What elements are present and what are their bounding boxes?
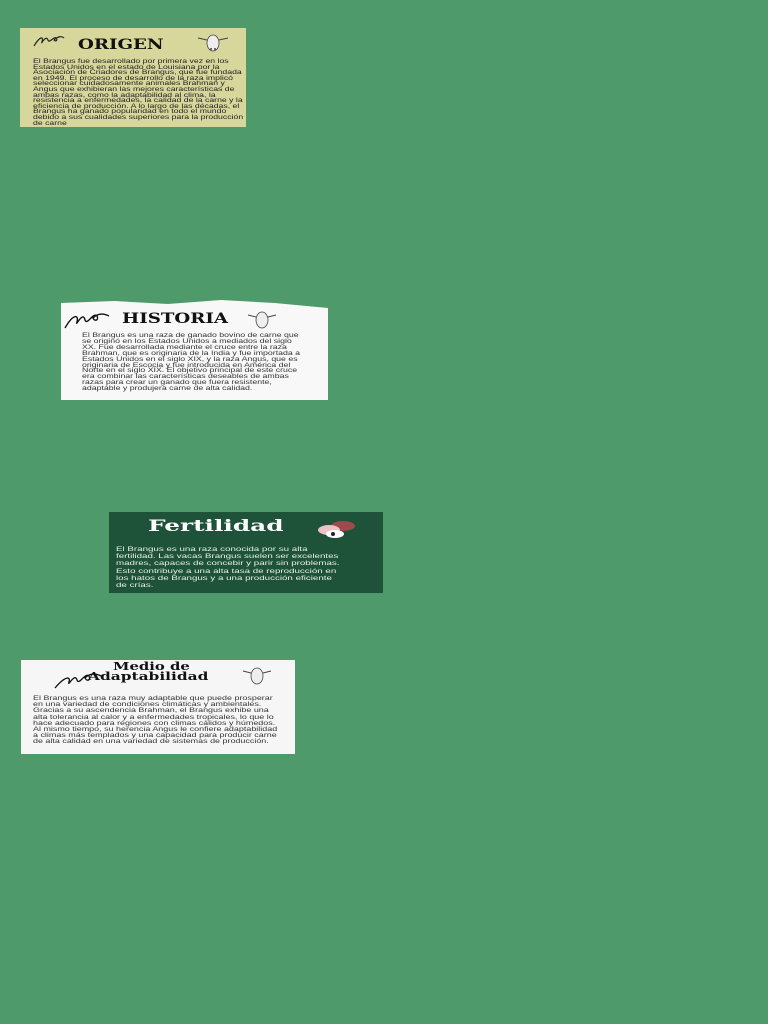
panel: origen bbox=[20, 28, 246, 127]
text: historia body: El Brangus es una raza de ganado bovino de carne que bbox=[82, 332, 299, 339]
text: adaptabilidad body: en una variedad de condiciones climáticas y ambientales. bbox=[33, 701, 261, 708]
text: adaptabilidad body: El Brangus es una raza muy adaptable que puede prosperar bbox=[33, 695, 273, 702]
heading: ORIGEN: ORIGEN bbox=[78, 37, 164, 53]
text: origen body: Asociación de Criadores de Brangus, que fue fundada bbox=[33, 69, 242, 76]
icon: swirl bbox=[64, 313, 110, 328]
text: adaptabilidad body: Gracias a su ascendencia Brahman, el Brangus exhibe una bbox=[33, 707, 269, 714]
icon: swirl bbox=[34, 36, 64, 46]
text: fertilidad body bbox=[116, 546, 339, 589]
text: adaptabilidad body: hace adecuado para regiones con climas cálidos y húmedos. bbox=[33, 720, 275, 727]
text: fertilidad body: El Brangus es una raza conocida por su alta bbox=[116, 546, 307, 553]
icon: cows bbox=[318, 521, 355, 538]
text: historia body: Norte en el siglo XIX. El objetivo principal de este cruce bbox=[82, 367, 297, 374]
text: historia body: se originó en los Estados Unidos a mediados del siglo bbox=[82, 338, 292, 345]
icon: swirl bbox=[54, 674, 102, 688]
text: historia body bbox=[82, 332, 300, 392]
text: historia body: Estados Unidos en el siglo XIX, y la raza Angus, que es bbox=[82, 356, 298, 363]
icon: cow head bbox=[198, 34, 228, 52]
icon: cow head bbox=[248, 312, 276, 328]
text: historia body: razas para crear un ganado que fuera resistente, bbox=[82, 379, 272, 386]
text: fertilidad body: los hatos de Brangus y a una producción eficiente bbox=[116, 575, 332, 582]
text: adaptabilidad body: alta tolerancia al calor y a enfermedades tropicales, lo que lo bbox=[33, 714, 274, 721]
text: adaptabilidad body: a climas más templados y una capacidad para producir carne bbox=[33, 732, 277, 739]
heading: Fertilidad: Fertilidad bbox=[148, 516, 284, 535]
text: origen body: debido a sus cualidades superiores para la producción bbox=[33, 114, 243, 121]
panel: medio de adaptabilidad bbox=[21, 660, 295, 754]
text: origen body: eficiencia de producción. A lo largo de las décadas, el bbox=[33, 103, 239, 110]
text: origen body: resistencia a enfermedades, la calidad de la carne y la bbox=[33, 97, 243, 104]
text: origen body: de carne bbox=[33, 120, 67, 127]
text: fertilidad body: fertilidad. Las vacas Brangus suelen ser excelentes bbox=[116, 553, 338, 560]
heading: Adaptabilidad: Adaptabilidad bbox=[88, 670, 208, 683]
text: adaptabilidad body bbox=[33, 695, 277, 745]
text: origen body: seleccionar cuidadosamente animales Brahman y bbox=[33, 80, 225, 87]
text: origen body: ambas razas, como la adaptabilidad al clima, la bbox=[33, 92, 216, 99]
text: fertilidad body: madres, capaces de concebir y parir sin problemas. bbox=[116, 560, 339, 567]
text: historia body: XX. Fue desarrollada mediante el cruce entre la raza bbox=[82, 344, 287, 351]
heading: Medio de: Medio de bbox=[113, 660, 190, 673]
heading: HISTORIA: HISTORIA bbox=[122, 311, 228, 327]
text: origen body: Angus que exhibieran las mejores características de bbox=[33, 86, 234, 93]
text: adaptabilidad body: Al mismo tiempo, su herencia Angus le confiere adaptabilidad bbox=[33, 726, 277, 733]
panel: historia bbox=[61, 300, 328, 400]
text: fertilidad body: de crías. bbox=[116, 582, 153, 589]
text: historia body: era combinar las características deseables de ambas bbox=[82, 373, 289, 380]
text: origen body: Brangus ha ganado popularidad en todo el mundo bbox=[33, 108, 226, 115]
text: fertilidad body: Esto contribuye a una alta tasa de reproducción en bbox=[116, 568, 336, 575]
panel: fertilidad bbox=[109, 512, 383, 593]
text: adaptabilidad body: de alta calidad en una variedad de sistemas de producción. bbox=[33, 738, 269, 745]
text: historia body: originaria de Escocia y fue introducida en América del bbox=[82, 362, 290, 369]
text: origen body: Estados Unidos en el estado de Louisiana por la bbox=[33, 64, 220, 71]
text: origen body bbox=[33, 58, 243, 127]
text: origen body: El Brangus fue desarrollado por primera vez en los bbox=[33, 58, 229, 65]
text: historia body: Brahman, que es originaria de la India y fue importada a bbox=[82, 350, 300, 357]
text: origen body: en 1949. El proceso de desarrollo de la raza implicó bbox=[33, 75, 233, 82]
icon: cow head bbox=[242, 668, 272, 684]
text: historia body: adaptable y produjera carne de alta calidad. bbox=[82, 385, 252, 392]
